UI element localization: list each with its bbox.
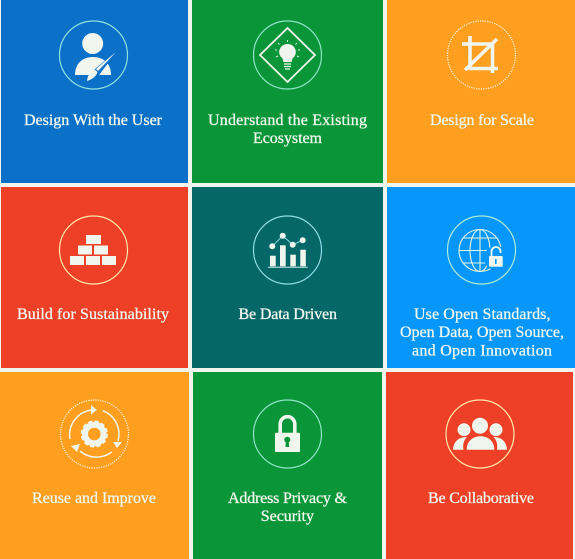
panel: build for sustainability	[1, 187, 188, 368]
label line block	[400, 306, 564, 360]
panel background	[387, 187, 575, 368]
label line block: Address Privacy &	[228, 490, 348, 507]
panel background	[192, 0, 383, 183]
label line block: Use Open Standards,	[414, 306, 550, 323]
label line block: and Open Innovation	[412, 342, 552, 360]
label line block: Open Data, Open Source,	[400, 324, 564, 341]
panel: use open standards	[387, 187, 575, 368]
icon: group of people	[453, 418, 507, 450]
icon: light bulb in diamond	[260, 28, 315, 82]
label: Be Data Driven	[238, 306, 337, 323]
icon: brick pyramid	[70, 235, 116, 265]
panel background	[386, 372, 573, 559]
panel: address privacy and security	[193, 372, 382, 559]
panel: design for scale	[387, 0, 575, 183]
icon ring	[60, 400, 128, 468]
panel: reuse and improve	[0, 372, 189, 559]
label: Be Collaborative	[428, 490, 534, 507]
label: Design With the User	[24, 112, 163, 129]
icon: bar chart with trend line	[268, 233, 308, 267]
panel background	[192, 187, 383, 368]
icon ring	[254, 21, 322, 89]
panel background	[193, 372, 382, 559]
label: Design for Scale	[430, 112, 534, 129]
icon ring	[448, 21, 516, 89]
label: Build for Sustainability	[17, 306, 169, 323]
icon ring	[446, 400, 514, 468]
panel background	[387, 0, 575, 183]
icon: user with paintbrush	[75, 33, 119, 84]
icon ring	[254, 400, 322, 468]
label: Reuse and Improve	[32, 490, 156, 507]
panel background	[0, 372, 189, 559]
panel: be collaborative	[386, 372, 573, 559]
panel background	[1, 0, 188, 183]
icon: crop	[462, 36, 498, 73]
icon ring	[60, 216, 128, 284]
icon ring	[448, 216, 516, 284]
label line block	[208, 112, 367, 147]
icon ring	[60, 21, 128, 89]
panel: be data driven	[192, 187, 383, 368]
panel background	[1, 187, 188, 368]
icon: gear with cycle arrows	[70, 405, 122, 457]
panel: understand the existing ecosystem	[192, 0, 383, 183]
label line block: Ecosystem	[253, 130, 323, 147]
icon ring	[254, 216, 322, 284]
label line block: Understand the Existing	[208, 112, 367, 129]
label line block: Security	[261, 508, 314, 525]
panel: design with the user	[1, 0, 188, 183]
label line block	[228, 490, 348, 525]
icon: padlock	[275, 417, 300, 452]
icon: globe with open padlock	[459, 230, 508, 272]
